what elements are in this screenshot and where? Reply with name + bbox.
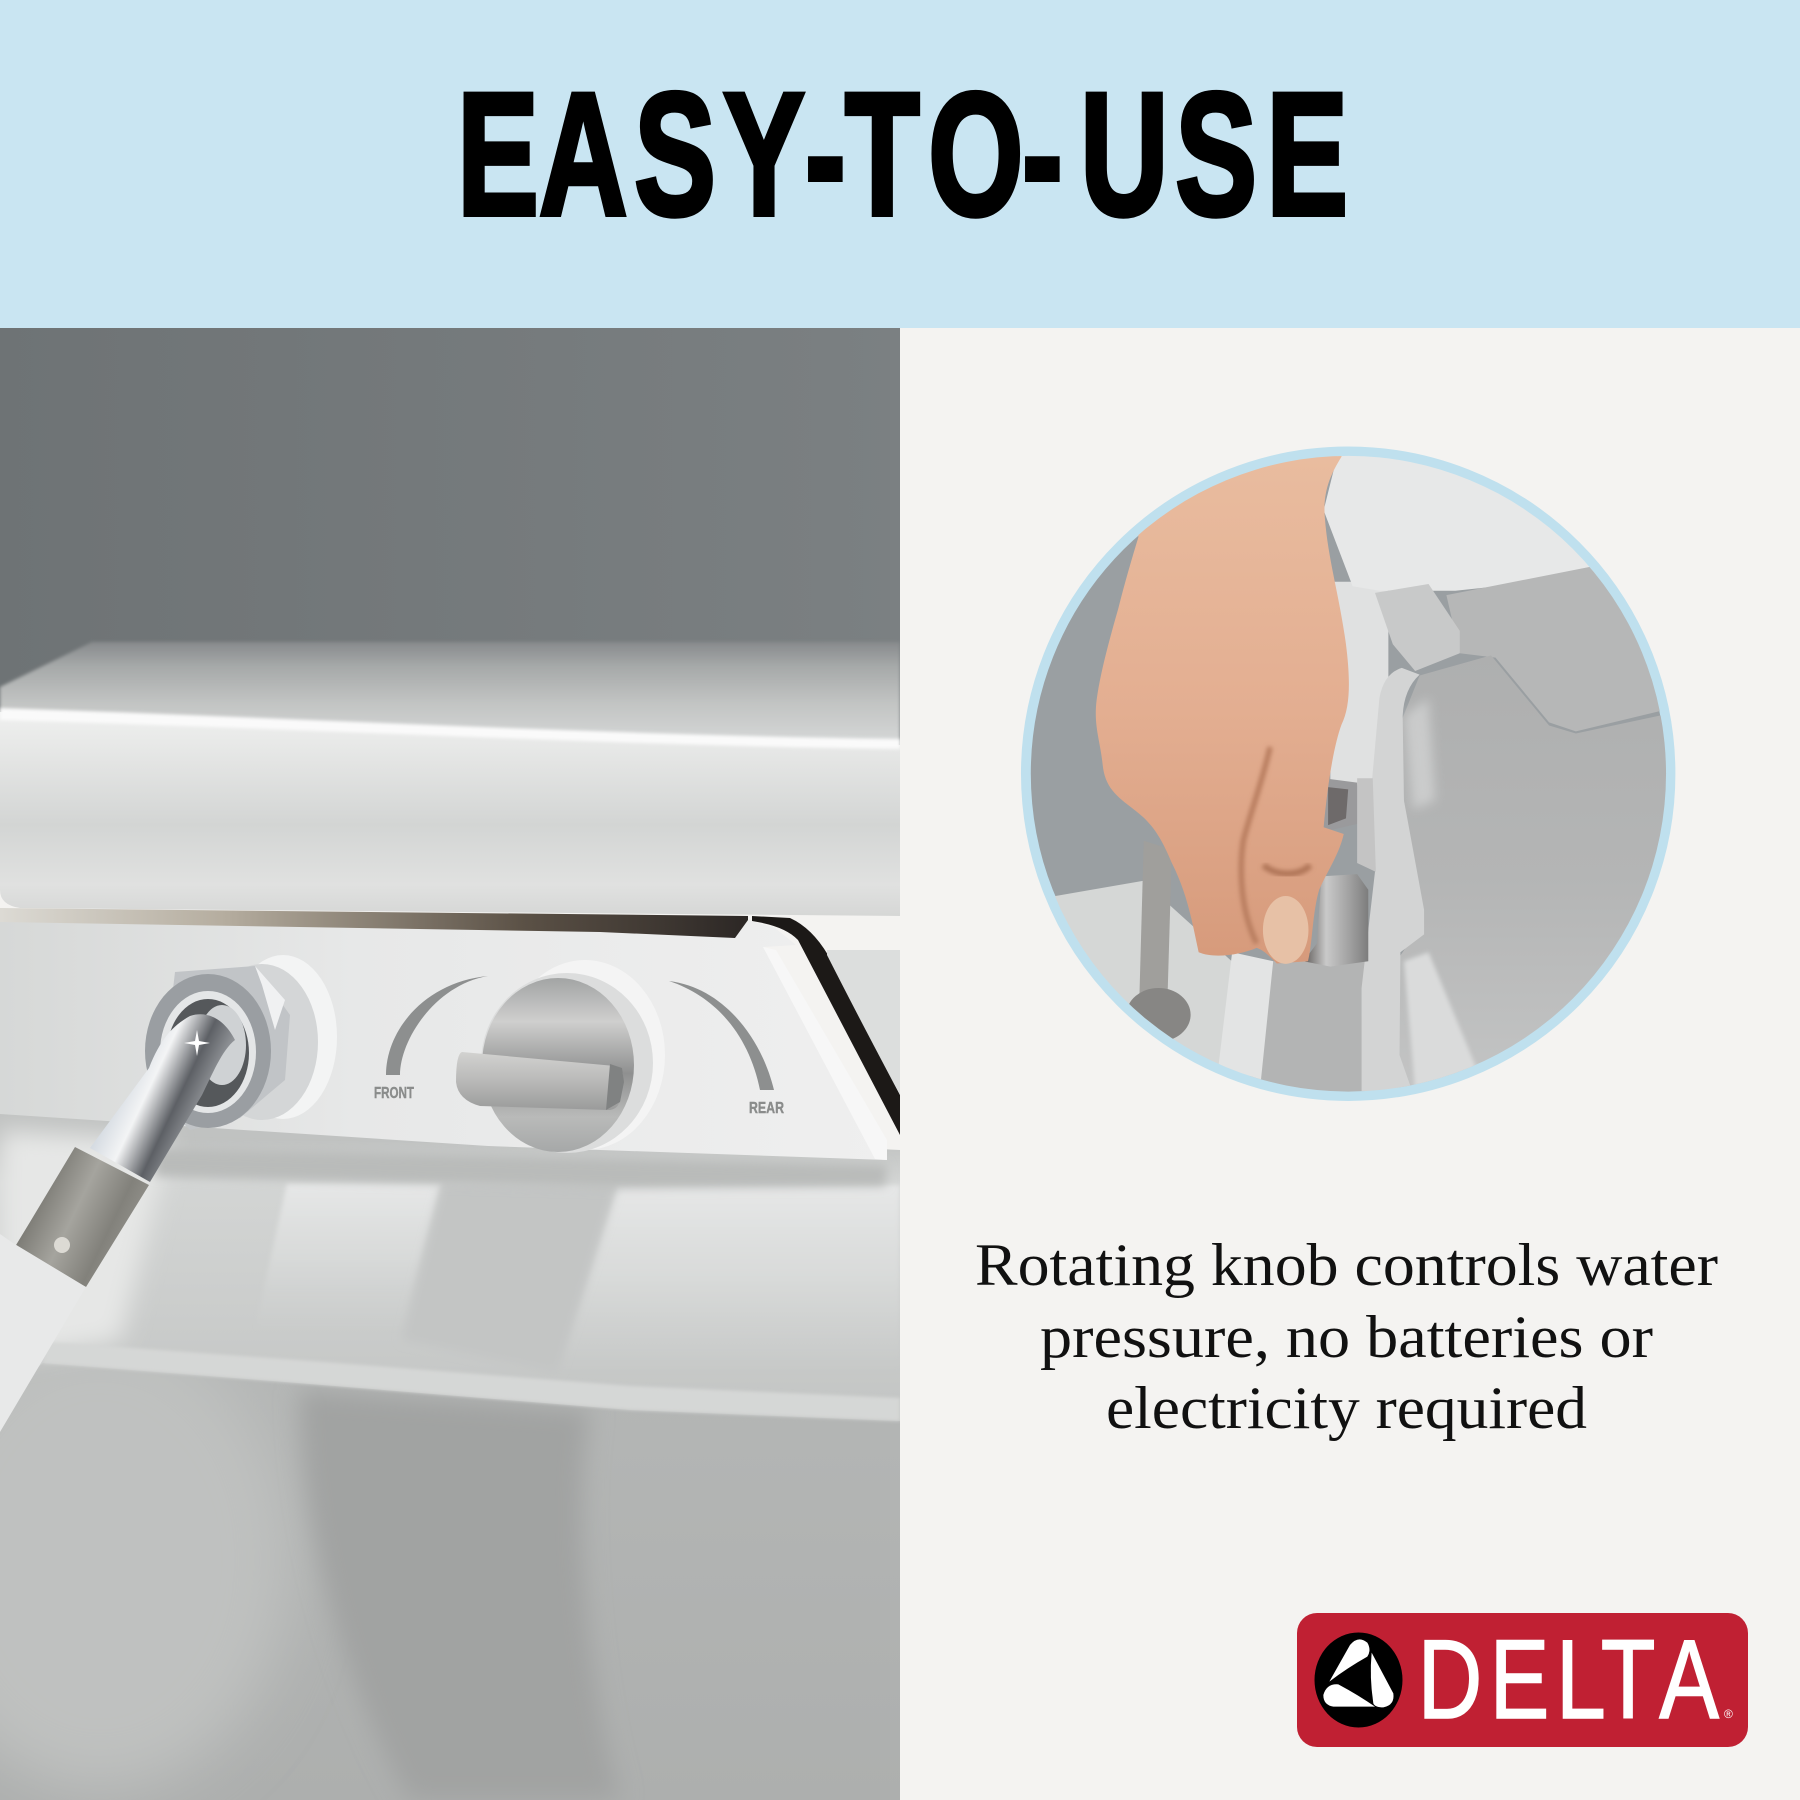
caption line 3: electricity required (1106, 1375, 1587, 1441)
logo mark (1314, 1632, 1402, 1728)
sparkle (184, 1030, 210, 1056)
gap under lid (0, 908, 748, 940)
white hose (1219, 952, 1273, 1100)
hand (1096, 430, 1349, 964)
bowl rim (0, 1110, 900, 1421)
braided supply hose (1140, 880, 1170, 993)
rear grey area (1250, 961, 1366, 1100)
rotating knob (456, 960, 665, 1153)
control panel (0, 920, 887, 1160)
circle ring (1026, 451, 1670, 1096)
rear arc (669, 981, 774, 1090)
wordmark: DELTA (1418, 1618, 1719, 1742)
bowl (0, 1330, 900, 1800)
fingernail (1263, 896, 1308, 964)
white lid (1324, 448, 1625, 591)
registered mark: ® (1724, 1707, 1733, 1721)
right lower panel (827, 950, 900, 1095)
photo: toilet seat side with knob and hose (0, 328, 900, 1800)
toilet lid front (0, 712, 900, 916)
caption line 2: pressure, no batteries or (1040, 1304, 1653, 1370)
grey wall (0, 328, 900, 768)
black slit (752, 916, 900, 1135)
main seat side (1397, 655, 1701, 1109)
lid highlight edge (0, 708, 900, 749)
grey lid side (1446, 559, 1696, 731)
clear washer (1357, 778, 1376, 872)
inset circle: hand turning knob (1026, 430, 1701, 1109)
floor area (1055, 881, 1231, 1064)
header banner (0, 0, 1800, 328)
white hose (0, 1234, 86, 1432)
front arc (386, 976, 488, 1075)
title: EASY-TO-USE (457, 57, 1348, 253)
hinge (1375, 584, 1460, 671)
rear label: REAR (749, 1100, 784, 1117)
caption (975, 1232, 1718, 1441)
chrome connector (1324, 778, 1362, 832)
front label: FRONT (374, 1085, 414, 1102)
caption line 1: Rotating knob controls water (975, 1232, 1718, 1298)
Delta logo (1297, 1613, 1748, 1747)
chrome elbow pipe (90, 1014, 235, 1182)
silver knob (1304, 874, 1368, 967)
hose fitting nut (145, 955, 337, 1130)
toilet lid top (0, 642, 900, 750)
light seat edge (1362, 668, 1424, 1100)
hose ferrule (13, 1147, 149, 1287)
